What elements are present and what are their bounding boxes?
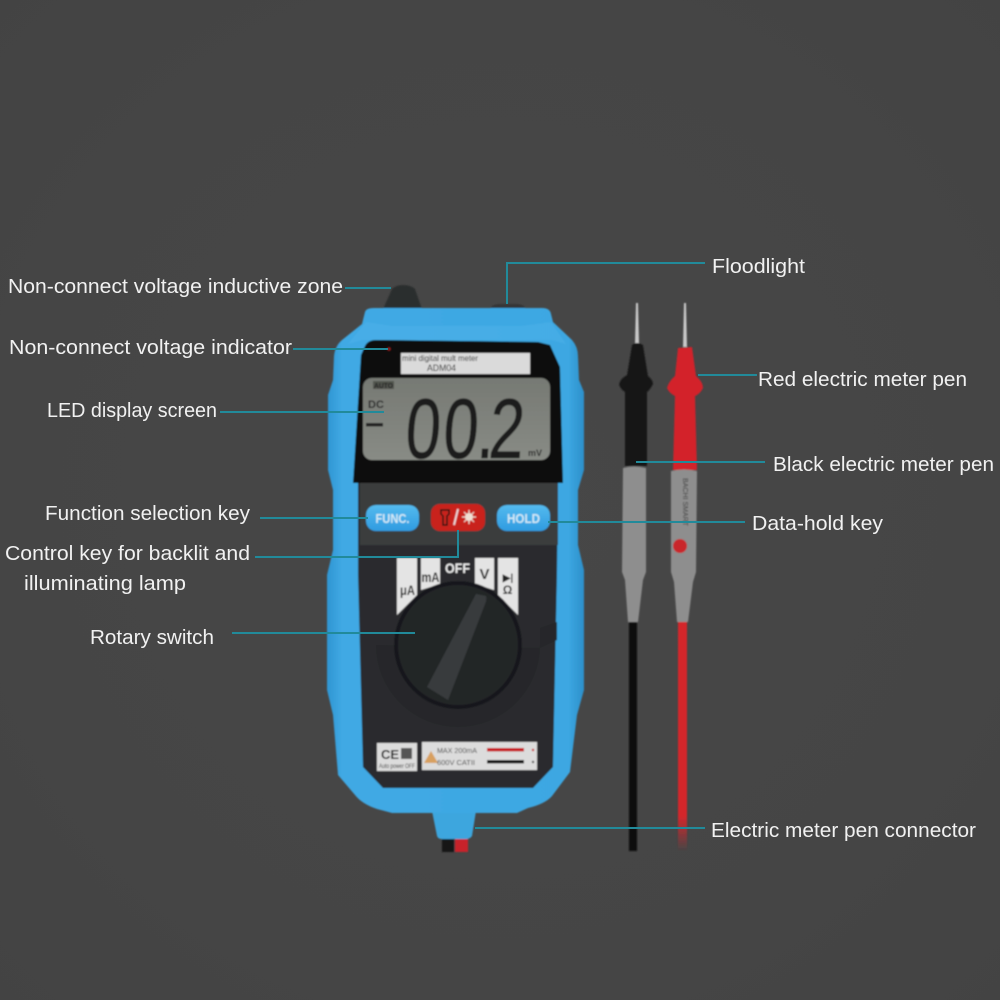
leader: voltage indicator: [293, 348, 388, 350]
button panel tone: [360, 483, 558, 545]
label: red pen: Red electric meter pen: [758, 368, 967, 391]
range labels: μA: [400, 582, 415, 598]
casing highlight: [348, 322, 566, 344]
label: function selection key: Function selection key: [45, 502, 251, 525]
non-contact voltage indicator LED: [387, 347, 391, 351]
range labels: OFF: [445, 560, 470, 576]
model label: [401, 353, 530, 374]
LCD readout: mV: [528, 448, 542, 458]
icon: floodlight lens: [490, 304, 526, 309]
label: voltage indicator: Non-connect voltage indicator: [9, 336, 292, 359]
leader: control key: [255, 530, 458, 557]
dark front panel: [358, 470, 558, 788]
leader: data-hold key: [548, 521, 745, 523]
label: LED display screen: LED display screen: [47, 399, 217, 422]
backlight key: [431, 504, 485, 531]
icon: non-contact voltage probe tip: [383, 285, 422, 309]
CE label: [377, 743, 417, 771]
LCD screen: [363, 378, 550, 460]
rotary dial: [394, 581, 522, 709]
range labels: Ω: [503, 583, 513, 597]
leader: black pen: [636, 461, 765, 463]
leader: function key: [260, 517, 368, 519]
leader: floodlight: [507, 263, 705, 304]
icon: pen connector: [432, 811, 476, 852]
black display bezel: [353, 340, 563, 483]
label: connector: Electric meter pen connector: [711, 819, 976, 842]
label: rotary switch: Rotary switch: [90, 626, 214, 649]
LCD readout: 00.2: [403, 381, 528, 476]
label: data-hold key: Data-hold key: [752, 512, 884, 535]
leader lines: [220, 263, 765, 828]
label: control key: illuminating lamp: [24, 572, 186, 595]
label: black pen: Black electric meter pen: [773, 453, 994, 476]
LCD readout: DC: [368, 399, 384, 411]
leader: red pen: [698, 374, 757, 376]
pen brand text: BACHI SMART: [681, 478, 688, 527]
red test pen: [667, 303, 703, 851]
CE label: Auto power OFF: [379, 763, 415, 770]
rating label: [422, 742, 537, 770]
leader: inductive zone: [345, 287, 391, 289]
range labels: ▶|: [502, 573, 513, 584]
range labels: V: [479, 566, 490, 583]
range labels: mA: [422, 569, 440, 585]
label: inductive zone: Non-connect voltage inductive zone: [8, 275, 343, 298]
rating label: MAX 200mA: [437, 746, 477, 755]
model label: mini digital mult meter: [402, 353, 478, 363]
CE label: CE: [381, 747, 399, 762]
test leads: [619, 303, 703, 851]
LCD readout: AUTO: [374, 383, 394, 390]
label: floodlight: Floodlight: [712, 255, 805, 278]
multimeter device: [327, 285, 584, 852]
leader: LED screen: [220, 411, 384, 413]
HOLD key: [497, 505, 550, 531]
leader: rotary switch: [232, 632, 415, 634]
black test pen: [619, 303, 653, 851]
blue rubber casing: [327, 308, 584, 813]
FUNC key: [366, 505, 419, 531]
dial recess: [376, 622, 557, 727]
rating label: 600V CATII: [437, 758, 475, 767]
range labels: [397, 558, 518, 615]
label: control key: [5, 542, 250, 595]
label: control key: Control key for backlit and: [5, 542, 250, 565]
FUNC key: FUNC.: [376, 511, 410, 526]
model label: ADM04: [427, 363, 456, 374]
leader: connector: [475, 827, 705, 829]
HOLD key: HOLD: [507, 511, 540, 526]
